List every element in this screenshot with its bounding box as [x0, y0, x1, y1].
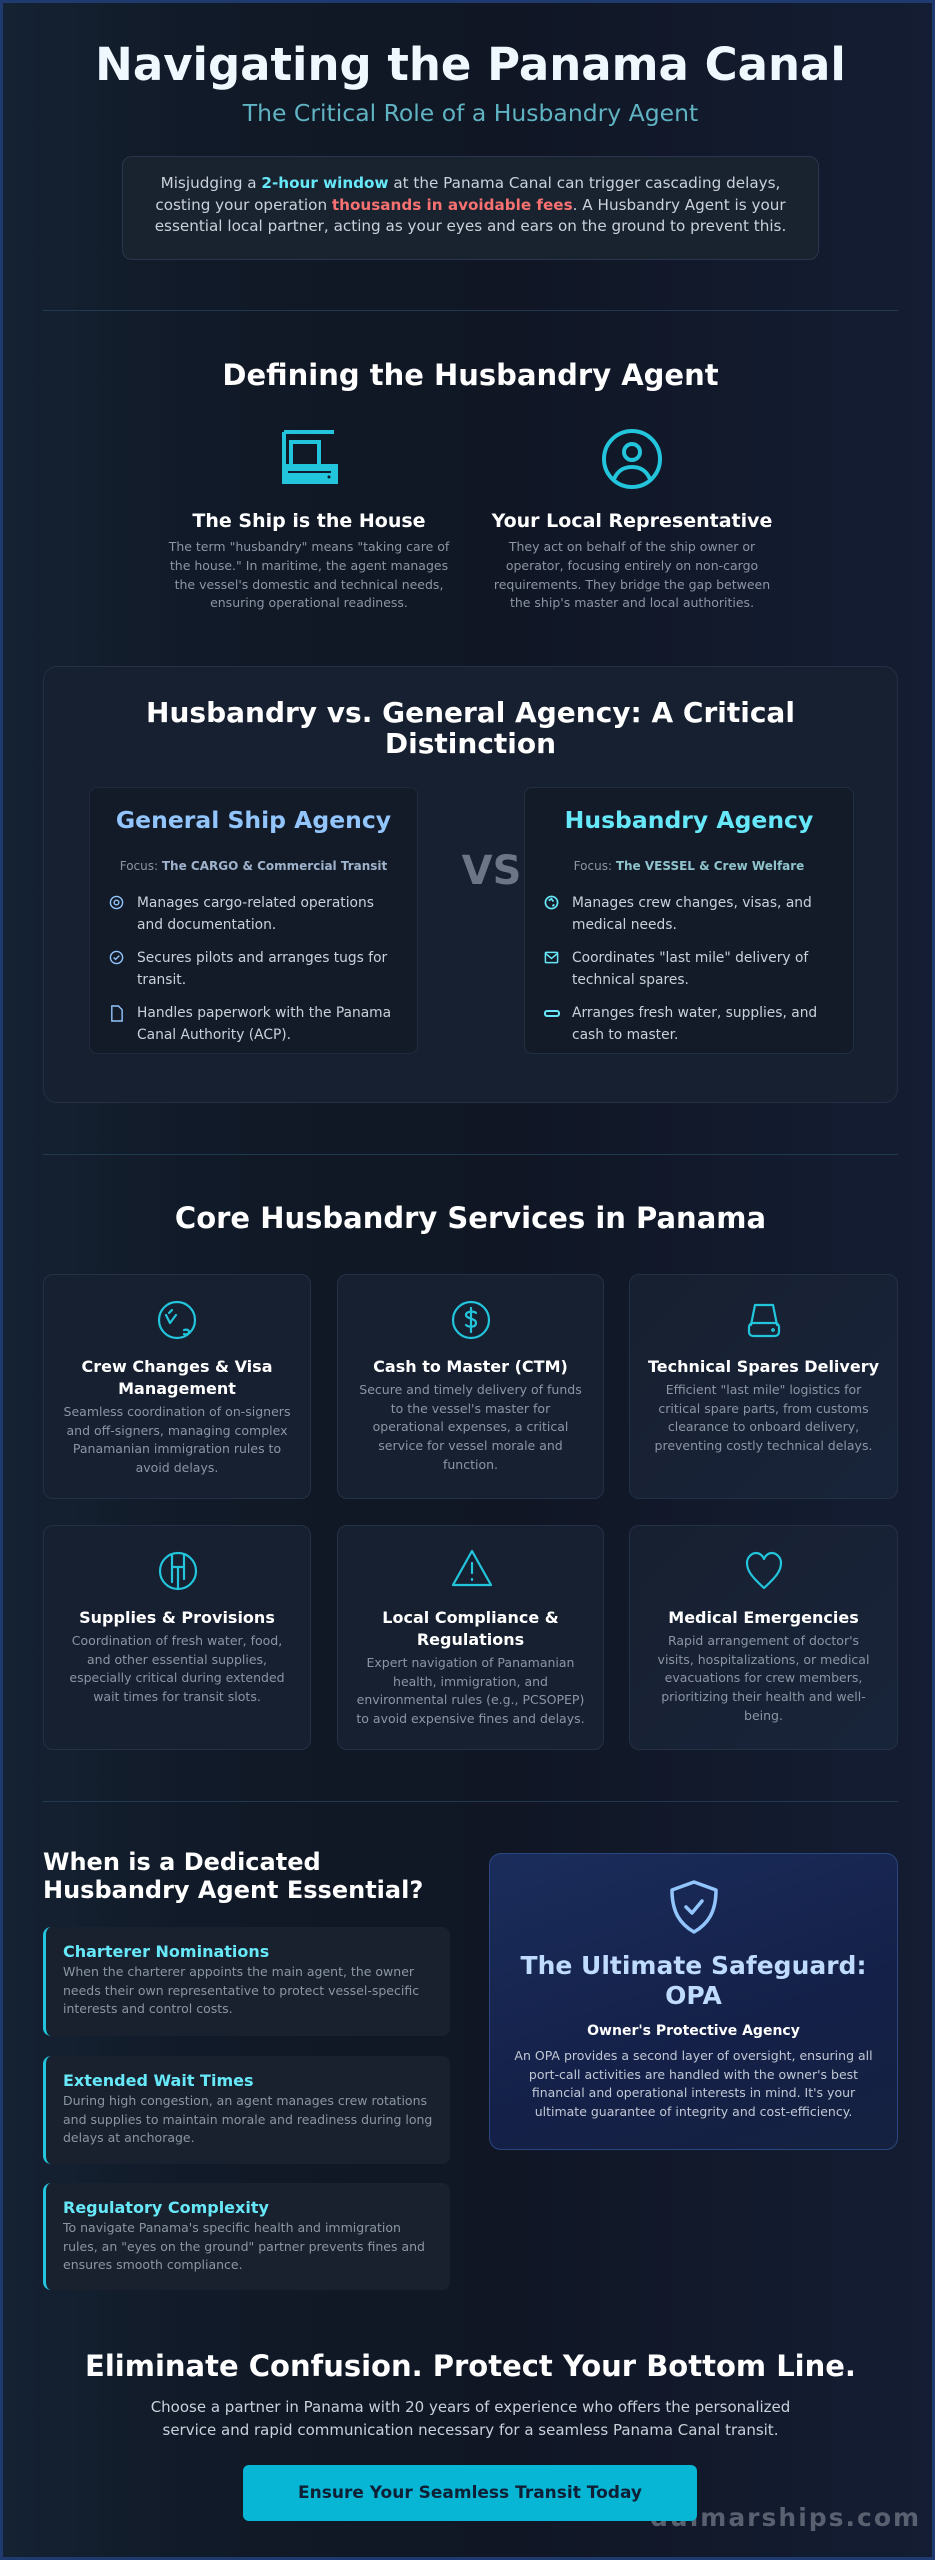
service card: compliance: health, immigration, and	[393, 1674, 548, 1689]
cta text: Choose a partner in Panama with 20 years of experience who offers the personalized	[151, 2398, 790, 2416]
icon: drive box	[748, 1304, 780, 1338]
column: local representative: Your Local Representative	[492, 510, 772, 532]
intro box: essential local partner, acting as your eyes and ears on the ground to prevent this.	[155, 217, 786, 235]
item: charterer nominations: interests and control costs.	[63, 2001, 233, 2016]
callout: OPA	[489, 1853, 898, 2150]
card: husbandry agency: Focus: The VESSEL & Crew Welfare	[574, 859, 804, 873]
icon: ship/house	[282, 430, 338, 484]
intro box	[122, 156, 819, 260]
bullet: supplies: Arranges fresh water, supplies, and	[572, 1005, 817, 1021]
item: regulatory complexity: Regulatory Complexity	[63, 2198, 269, 2217]
column: local representative: requirements. They bridge the gap between	[494, 577, 770, 592]
callout: OPA: OPA	[665, 1981, 722, 2010]
service card: cash to master	[337, 1274, 604, 1499]
service card: crew changes: Panamanian immigration rules to	[73, 1441, 281, 1456]
panel heading: Distinction	[385, 727, 556, 760]
item: extended wait times: delays at anchorage.	[63, 2130, 195, 2145]
bullet: cargo operations: and documentation.	[137, 917, 276, 933]
icon: supplies	[158, 1552, 198, 1590]
panel heading	[146, 696, 795, 760]
service card: cash to master: operational expenses, a critical	[373, 1419, 568, 1434]
heading: defining: Defining the Husbandry Agent	[222, 358, 719, 392]
column: ship is the house: The term "husbandry" means "taking care of	[169, 539, 449, 554]
service card: compliance	[337, 1525, 604, 1750]
icon: crew globe	[158, 1300, 196, 1340]
bullet: ACP paperwork	[111, 1005, 391, 1043]
service card: medical: Rapid arrangement of doctor's	[668, 1633, 859, 1648]
service card: supplies: wait times for transit slots.	[93, 1689, 261, 1704]
item: charterer nominations: When the charterer appoints the main agent, the owner	[63, 1964, 414, 1979]
subtitle: The Critical Role of a Husbandry Agent	[243, 99, 698, 127]
icon: shield	[670, 1880, 718, 1934]
service card: cash to master: to the vessel's master for	[391, 1401, 550, 1416]
title: Navigating the Panama Canal	[95, 38, 846, 91]
service card: technical spares: Technical Spares Delivery	[648, 1357, 879, 1376]
bullet: pilots and tugs: Secures pilots and arranges tugs for	[137, 950, 387, 966]
bullet: supplies	[544, 1005, 817, 1043]
service card: crew changes: and off-signers, managing complex	[66, 1423, 288, 1438]
bullet: crew changes: medical needs.	[572, 917, 677, 933]
bullet: pilots and tugs	[110, 950, 388, 988]
service card: supplies	[43, 1525, 311, 1750]
service card: crew changes: avoid delays.	[136, 1460, 218, 1475]
service card: cash to master: Cash to Master (CTM)	[373, 1357, 568, 1376]
service card: supplies: and other essential supplies,	[87, 1652, 267, 1667]
service card: medical: visits, hospitalizations, or medical	[658, 1652, 869, 1667]
bullet: crew changes	[544, 895, 812, 933]
service card: medical	[629, 1525, 898, 1750]
bullet: cargo operations	[110, 895, 374, 933]
card: general ship agency	[89, 787, 418, 1054]
icon: heart	[746, 1552, 782, 1590]
service card: technical spares	[629, 1274, 898, 1499]
cta button: Ensure Your Seamless Transit Today	[298, 2483, 642, 2503]
bullet: cargo operations: Manages cargo-related operations	[137, 895, 374, 911]
service card: crew changes: Crew Changes & Visa	[82, 1357, 272, 1376]
item: extended wait times: and supplies to maintain morale and readiness during long	[63, 2112, 432, 2126]
item: extended wait times: During high congestion, an agent manages crew rotations	[63, 2093, 427, 2108]
service card: cash to master: Secure and timely delivery of funds	[359, 1382, 582, 1397]
service card: medical: Medical Emergencies	[668, 1608, 859, 1627]
service card: supplies: Supplies & Provisions	[79, 1608, 275, 1627]
bullet: pilots and tugs: transit.	[137, 972, 186, 988]
bullet: spares delivery	[544, 950, 808, 988]
icon: person	[602, 429, 662, 489]
service card: supplies: especially critical during extended	[69, 1670, 285, 1685]
bullet: crew changes: Manages crew changes, visas, and	[572, 895, 812, 911]
item: regulatory complexity: To navigate Panama's specific health and immigration	[63, 2220, 401, 2235]
column: local representative	[492, 429, 772, 610]
column: ship is the house: the vessel's domestic and technical needs,	[175, 577, 443, 592]
panel heading: Husbandry vs. General Agency: A Critical	[146, 696, 795, 729]
heading: core services: Core Husbandry Services in Panama	[175, 1201, 766, 1235]
cta heading: Eliminate Confusion. Protect Your Bottom Line.	[85, 2349, 856, 2383]
service card: compliance: Local Compliance &	[382, 1608, 559, 1627]
intro box: costing your operation thousands in avoidable fees. A Husbandry Agent is your	[155, 196, 786, 214]
card: general ship agency: General Ship Agency	[116, 806, 391, 834]
column: local representative: the ship's master and local authorities.	[510, 595, 754, 610]
intro box: Misjudging a 2-hour window at the Panama Canal can trigger cascading delays,	[161, 174, 780, 192]
service card: medical: prioritizing their health and well-	[661, 1689, 866, 1704]
column: ship is the house	[168, 430, 450, 610]
icon: dollar	[452, 1300, 490, 1340]
column: ship is the house: The Ship is the House	[192, 510, 426, 532]
icon: warning	[452, 1550, 492, 1586]
bullet: ACP paperwork: Canal Authority (ACP).	[137, 1027, 291, 1043]
card: husbandry agency: Husbandry Agency	[565, 806, 813, 834]
callout: OPA: port-call activities are handled with the owner's best	[529, 2067, 858, 2082]
service card: medical: evacuations for crew members,	[665, 1670, 862, 1685]
item: regulatory complexity: rules, an "eyes on the ground" partner prevents fines and	[63, 2238, 425, 2254]
service card: compliance: to avoid expensive fines and delays.	[356, 1711, 585, 1726]
callout: OPA: Owner's Protective Agency	[587, 2023, 800, 2039]
card: general ship agency: Focus: The CARGO & Commercial Transit	[120, 859, 387, 873]
callout: OPA: The Ultimate Safeguard:	[521, 1951, 866, 1980]
service card: cash to master: service for vessel morale and	[378, 1438, 563, 1453]
service card: compliance: Expert navigation of Panamanian	[367, 1655, 574, 1670]
cta text: service and rapid communication necessary for a seamless Panama Canal transit.	[163, 2420, 778, 2438]
service card: technical spares: clearance to onboard delivery,	[668, 1419, 859, 1434]
item: regulatory complexity	[43, 2183, 450, 2290]
column: local representative: operator, focusing entirely on non-cargo	[506, 558, 758, 573]
item: charterer nominations	[43, 1927, 450, 2036]
heading: when essential	[43, 1848, 423, 1904]
service card: crew changes	[43, 1274, 311, 1499]
service card: medical: being.	[744, 1708, 783, 1723]
service card: compliance: Regulations	[417, 1630, 524, 1649]
service card: cash to master: function.	[443, 1457, 498, 1472]
item: extended wait times: Extended Wait Times	[63, 2071, 254, 2090]
heading: when essential: When is a Dedicated	[43, 1848, 321, 1876]
watermark: dulmarships.com	[650, 2503, 921, 2532]
vs label: VS	[462, 848, 521, 894]
service card: crew changes: Seamless coordination of on-signers	[64, 1404, 290, 1419]
callout: OPA: ultimate guarantee of integrity and cost-efficiency.	[535, 2104, 852, 2119]
column: ship is the house: the house." In maritime, the agent manages	[170, 558, 448, 573]
item: charterer nominations: Charterer Nominations	[63, 1942, 269, 1961]
column: ship is the house: ensuring operational readiness.	[210, 595, 408, 610]
cta text	[151, 2398, 790, 2438]
item: regulatory complexity: ensures smooth compliance.	[63, 2257, 243, 2272]
bullet: ACP paperwork: Handles paperwork with the Panama	[137, 1005, 391, 1021]
service card: technical spares: preventing costly technical delays.	[655, 1438, 872, 1453]
bullet: spares delivery: Coordinates "last mile" delivery of	[572, 950, 808, 966]
service card: crew changes: Management	[118, 1379, 236, 1398]
item: charterer nominations: needs their own representative to protect vessel-specific	[63, 1982, 419, 1998]
cta button	[243, 2465, 697, 2521]
bullet: spares delivery: technical spares.	[572, 972, 689, 988]
callout: OPA: An OPA provides a second layer of oversight, ensuring all	[514, 2048, 873, 2063]
card: husbandry agency	[524, 787, 854, 1054]
service card: technical spares: critical spare parts, from customs	[658, 1401, 869, 1416]
service card: compliance: environmental rules (e.g., PCSOPEP)	[357, 1692, 584, 1707]
heading: when essential: Husbandry Agent Essential?	[43, 1876, 423, 1904]
service card: supplies: Coordination of fresh water, food,	[72, 1633, 282, 1648]
column: local representative: They act on behalf of the ship owner or	[509, 539, 755, 554]
bullet: supplies: cash to master.	[572, 1027, 678, 1043]
item: extended wait times	[43, 2056, 450, 2164]
panel: husbandry vs general agency	[43, 666, 898, 1103]
service card: technical spares: Efficient "last mile" logistics for	[666, 1382, 861, 1397]
callout: OPA: financial and operational interests in mind. It's your	[532, 2085, 855, 2100]
